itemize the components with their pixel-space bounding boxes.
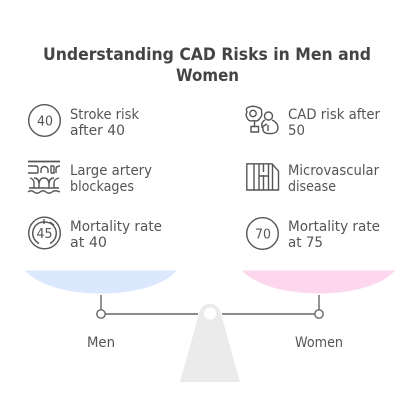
text: microvascular disease bbox=[288, 163, 379, 195]
label: women: Women bbox=[295, 335, 343, 351]
text: CAD risk after 50 bbox=[288, 107, 380, 139]
text: mortality rate at 75 bbox=[288, 219, 380, 251]
right pan bbox=[242, 270, 395, 294]
left pan bbox=[25, 270, 176, 294]
text: mortality rate at 40: at 40 bbox=[70, 235, 107, 251]
fulcrum bbox=[180, 304, 240, 382]
icon: stroke risk 40: 40 bbox=[37, 114, 53, 130]
text: large artery blockages: blockages bbox=[70, 179, 134, 195]
text: stroke risk after 40 bbox=[70, 107, 140, 139]
text: mortality rate at 40: Mortality rate bbox=[70, 219, 162, 235]
icon: mortality rate 70: 70 bbox=[255, 226, 271, 242]
title bbox=[43, 45, 371, 86]
label: men: Men bbox=[87, 335, 115, 351]
text: large artery blockages bbox=[70, 163, 152, 195]
icon: mortality rate 45 bbox=[29, 217, 60, 249]
icon: mortality rate 45: 45 bbox=[36, 226, 52, 242]
text: stroke risk after 40: after 40 bbox=[70, 123, 125, 139]
text: CAD risk after 50: 50 bbox=[288, 123, 305, 139]
text: CAD risk after 50: CAD risk after bbox=[288, 107, 380, 123]
text: microvascular disease: Microvascular bbox=[288, 163, 379, 179]
icon: mortality rate 70 bbox=[247, 218, 278, 249]
icon: flower and person bbox=[246, 106, 278, 134]
icon: stroke risk 40 bbox=[29, 105, 60, 136]
text: mortality rate at 75: at 75 bbox=[288, 235, 323, 251]
text: mortality rate at 40 bbox=[70, 219, 162, 251]
text: microvascular disease: disease bbox=[288, 179, 336, 195]
text: stroke risk after 40: Stroke risk bbox=[70, 107, 140, 123]
title: Women bbox=[176, 66, 239, 86]
icon: large artery blockages bbox=[28, 162, 60, 193]
text: large artery blockages: Large artery bbox=[70, 163, 152, 179]
balance beam bbox=[97, 295, 323, 318]
text: mortality rate at 75: Mortality rate bbox=[288, 219, 380, 235]
title: Understanding CAD Risks in Men and bbox=[43, 45, 371, 65]
icon: microvascular disease bbox=[247, 164, 278, 190]
pivot hole bbox=[204, 308, 216, 320]
